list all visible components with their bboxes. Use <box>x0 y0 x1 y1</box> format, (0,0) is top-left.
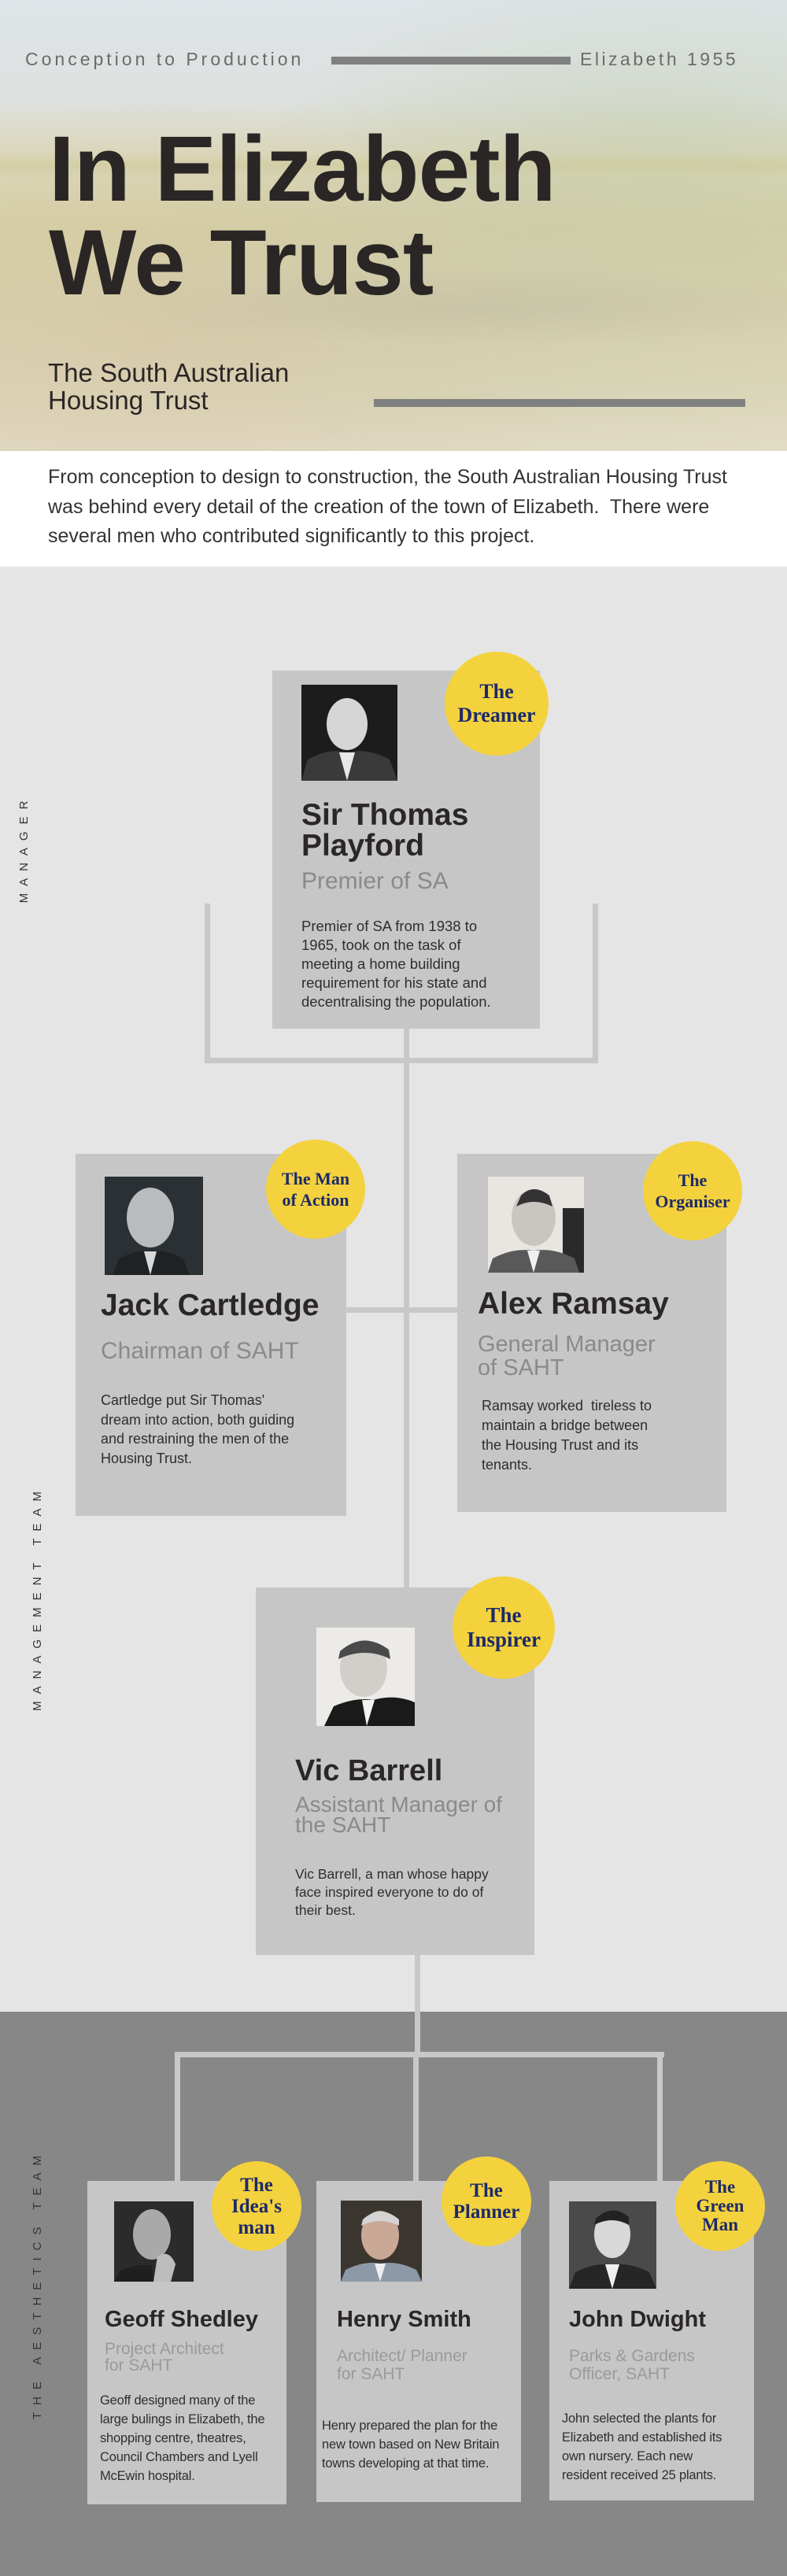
name: Playford <box>301 829 424 863</box>
description: resident received 25 plants. <box>562 2468 716 2482</box>
description: Ramsay worked tireless to <box>482 1398 652 1414</box>
description: new town based on New Britain <box>322 2437 499 2452</box>
description: Council Chambers and Lyell <box>100 2450 258 2464</box>
badge: The Inspirer <box>453 1576 555 1679</box>
badge: The Dreamer: Dreamer <box>457 704 536 726</box>
intro text: was behind every detail of the creation of the town of Elizabeth. There were <box>48 496 709 518</box>
description: own nursery. Each new <box>562 2449 693 2463</box>
badge: The Organiser: Organiser <box>655 1192 730 1211</box>
header panel: painted landscape background <box>0 0 787 451</box>
badge: The Green Man: The <box>705 2177 735 2197</box>
description: Geoff designed many of the <box>100 2393 255 2408</box>
subtitle bar <box>374 399 745 407</box>
description: dream into action, both guiding <box>101 1412 294 1428</box>
card: Vic Barrell <box>256 1587 534 1955</box>
title: In Elizabeth <box>49 117 556 221</box>
header bar <box>331 57 571 65</box>
description: Premier of SA from 1938 to <box>301 918 477 934</box>
name: Alex Ramsay <box>478 1287 669 1321</box>
badge: The Idea's man: The <box>240 2174 273 2196</box>
description: the Housing Trust and its <box>482 1437 638 1453</box>
description: Vic Barrell, a man whose happy <box>295 1866 489 1882</box>
description: tenants. <box>482 1457 532 1473</box>
name: Henry Smith <box>337 2307 471 2332</box>
intro text: several men who contributed significantly to this project. <box>48 525 534 547</box>
role <box>478 1332 656 1380</box>
role: the SAHT <box>295 1813 390 1837</box>
badge: The Idea's man: Idea's <box>231 2196 282 2216</box>
name: Geoff Shedley <box>105 2307 258 2332</box>
name: Vic Barrell <box>295 1754 442 1787</box>
badge: The Green Man: Green <box>696 2196 744 2216</box>
card: Henry Smith <box>316 2181 521 2502</box>
label: MANAGER: MANAGER <box>17 794 31 903</box>
name: Jack Cartledge <box>101 1288 319 1322</box>
card: John Dwight <box>549 2181 754 2500</box>
role: Chairman of SAHT <box>101 1338 299 1364</box>
description <box>100 2393 264 2483</box>
role: Officer, SAHT <box>569 2365 670 2383</box>
photo: Dwight <box>569 2201 656 2289</box>
name <box>301 798 468 863</box>
role: Premier of SA <box>301 868 449 894</box>
photo: Playford <box>301 685 397 781</box>
description: and restraining the men of the <box>101 1431 289 1447</box>
badge: The Inspirer: The <box>486 1603 521 1627</box>
description: Housing Trust. <box>101 1450 192 1465</box>
badge: The Green Man: Man <box>702 2215 738 2234</box>
photo: Smith <box>341 2201 422 2282</box>
badge: The Dreamer: The <box>479 680 514 703</box>
description <box>482 1398 652 1473</box>
role: for SAHT <box>337 2365 405 2383</box>
role: Project Architect <box>105 2340 224 2358</box>
subtitle <box>48 358 289 415</box>
badge: The Idea's man: man <box>238 2216 275 2238</box>
description: John selected the plants for <box>562 2412 716 2426</box>
name: John Dwight <box>569 2307 706 2332</box>
description: towns developing at that time. <box>322 2456 489 2471</box>
badge: The Dreamer <box>445 652 549 756</box>
description: 1965, took on the task of <box>301 937 461 953</box>
description <box>101 1392 294 1466</box>
badge: The Idea's man <box>212 2161 301 2251</box>
description: their best. <box>295 1902 356 1918</box>
title <box>49 117 556 315</box>
photo: Shedley <box>114 2201 194 2282</box>
description: meeting a home building <box>301 955 460 972</box>
badge: The Planner: Planner <box>453 2201 519 2223</box>
intro text <box>0 451 787 567</box>
description: maintain a bridge between <box>482 1417 648 1433</box>
description: face inspired everyone to do of <box>295 1884 483 1900</box>
badge: The Planner <box>442 2157 531 2246</box>
role: Parks & Gardens <box>569 2347 695 2365</box>
description <box>295 1866 489 1918</box>
badge: The Man of Action: of Action <box>283 1190 349 1210</box>
intro text: From conception to design to construction, the South Australian Housing Trust <box>48 466 727 488</box>
photo: Ramsay <box>488 1177 584 1273</box>
card: Sir Thomas Playford <box>272 671 540 1029</box>
role: Assistant Manager of <box>295 1792 502 1817</box>
badge: The Inspirer: Inspirer <box>467 1628 541 1651</box>
role <box>569 2347 695 2383</box>
subtitle: Housing Trust <box>48 386 209 415</box>
header tagline right: Elizabeth 1955 <box>580 49 738 69</box>
label: MANAGEMENT TEAM: MANAGEMENT TEAM <box>31 1484 44 1711</box>
description: McEwin hospital. <box>100 2469 195 2483</box>
role <box>337 2347 467 2383</box>
card: Jack Cartledge <box>76 1154 346 1516</box>
photo: Cartledge <box>105 1177 203 1275</box>
card: Alex Ramsay <box>457 1154 726 1512</box>
subtitle: The South Australian <box>48 358 289 387</box>
role: General Manager <box>478 1332 656 1357</box>
role: of SAHT <box>478 1355 564 1380</box>
badge: The Organiser: The <box>678 1170 707 1190</box>
description: decentralising the population. <box>301 993 491 1010</box>
role <box>295 1792 502 1837</box>
badge: The Green Man <box>675 2161 765 2251</box>
label: THE AESTHETICS TEAM: THE AESTHETICS TEAM <box>31 2149 44 2419</box>
role: for SAHT <box>105 2356 172 2375</box>
title: We Trust <box>49 211 433 315</box>
role: Architect/ Planner <box>337 2347 467 2365</box>
description: Elizabeth and established its <box>562 2430 722 2445</box>
description: large bulings in Elizabeth, the <box>100 2412 264 2426</box>
role <box>105 2340 224 2375</box>
dark section background: aesthetics team <box>0 2012 787 2576</box>
description: Cartledge put Sir Thomas' <box>101 1392 264 1408</box>
description: Henry prepared the plan for the <box>322 2419 497 2433</box>
name: Sir Thomas <box>301 798 468 832</box>
header tagline left: Conception to Production <box>25 49 304 69</box>
badge: The Planner: The <box>470 2180 503 2201</box>
card: Geoff Shedley <box>87 2181 286 2504</box>
badge: The Organiser <box>643 1141 742 1240</box>
description <box>322 2419 499 2471</box>
description: shopping centre, theatres, <box>100 2431 246 2445</box>
badge: The Man of Action <box>266 1140 365 1239</box>
description: requirement for his state and <box>301 974 486 991</box>
description <box>562 2412 722 2482</box>
description <box>301 918 491 1010</box>
photo: Barrell <box>316 1628 415 1726</box>
badge: The Man of Action: The Man <box>282 1169 349 1188</box>
